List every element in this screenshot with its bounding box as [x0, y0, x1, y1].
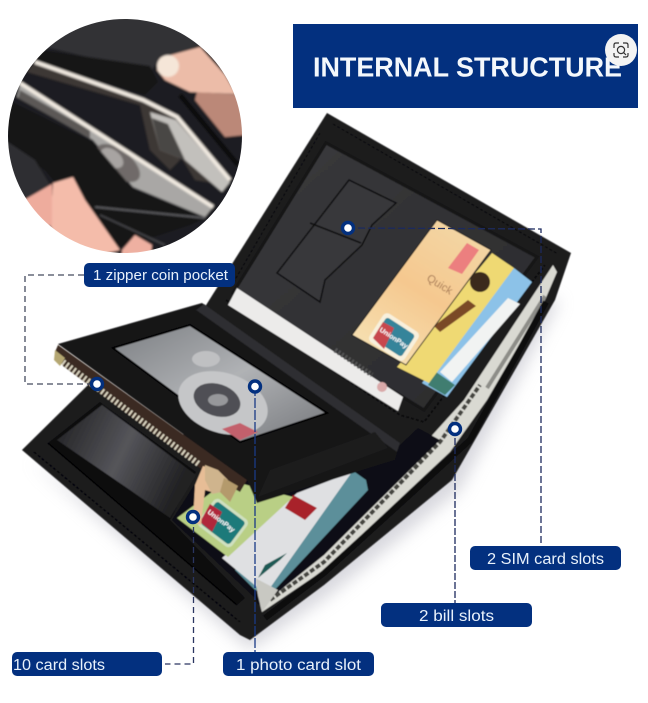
front lower panel [22, 383, 262, 640]
label: 1 photo card slot: 1 photo card slot [236, 657, 362, 674]
label: 2 SIM card slots: 2 SIM card slots [487, 551, 604, 568]
leader line: SIM card slots [348, 228, 541, 543]
cream card: Quick [424, 272, 455, 298]
marker: zipper pocket [92, 378, 102, 390]
detail photo: open wallet with banknotes [8, 19, 242, 253]
leader line: card slots [165, 517, 194, 664]
inner panel [233, 143, 537, 410]
zipper flap [55, 303, 400, 503]
title banner: INTERNAL STRUCTURE [313, 52, 622, 82]
label: 2 bill slots [381, 603, 532, 627]
back panel [170, 113, 571, 640]
marker: bill slots [450, 424, 460, 434]
label: 1 zipper coin pocket: 1 zipper coin pocket [93, 267, 229, 284]
leader line: photo card slot [254, 386, 256, 652]
interior cards: UnionPay [206, 509, 236, 534]
shadow under wallet [30, 300, 560, 650]
label: 1 photo card slot [223, 652, 374, 676]
label: 1 zipper coin pocket [84, 263, 235, 287]
yellow card [397, 253, 514, 383]
stitched SIM pocket [277, 180, 396, 302]
leader line: zipper coin pocket [25, 275, 90, 384]
cream card: UnionPay [378, 327, 409, 350]
zipper end [54, 350, 65, 366]
label: 2 SIM card slots [470, 546, 621, 570]
photo window [113, 325, 327, 446]
marker: card slots [188, 512, 198, 522]
zipper pull [193, 465, 238, 525]
interior cards [177, 470, 368, 612]
label: 10 card slots: 10 card slots [13, 657, 105, 674]
title banner [293, 24, 638, 108]
marker: SIM slots [342, 222, 354, 234]
label: 10 card slots [12, 652, 162, 676]
marker: photo slot [250, 381, 260, 392]
zipper teeth [63, 362, 200, 465]
bill strips [258, 265, 557, 612]
icon: visual search button [605, 34, 637, 66]
label: 2 bill slots: 2 bill slots [419, 608, 494, 625]
outer edge [265, 302, 546, 618]
white ID card [228, 288, 403, 411]
blue card [422, 268, 532, 397]
interior dark gap [170, 428, 440, 605]
wallet [22, 113, 571, 640]
leader line: bill slots [454, 429, 456, 603]
cream card [352, 220, 491, 365]
